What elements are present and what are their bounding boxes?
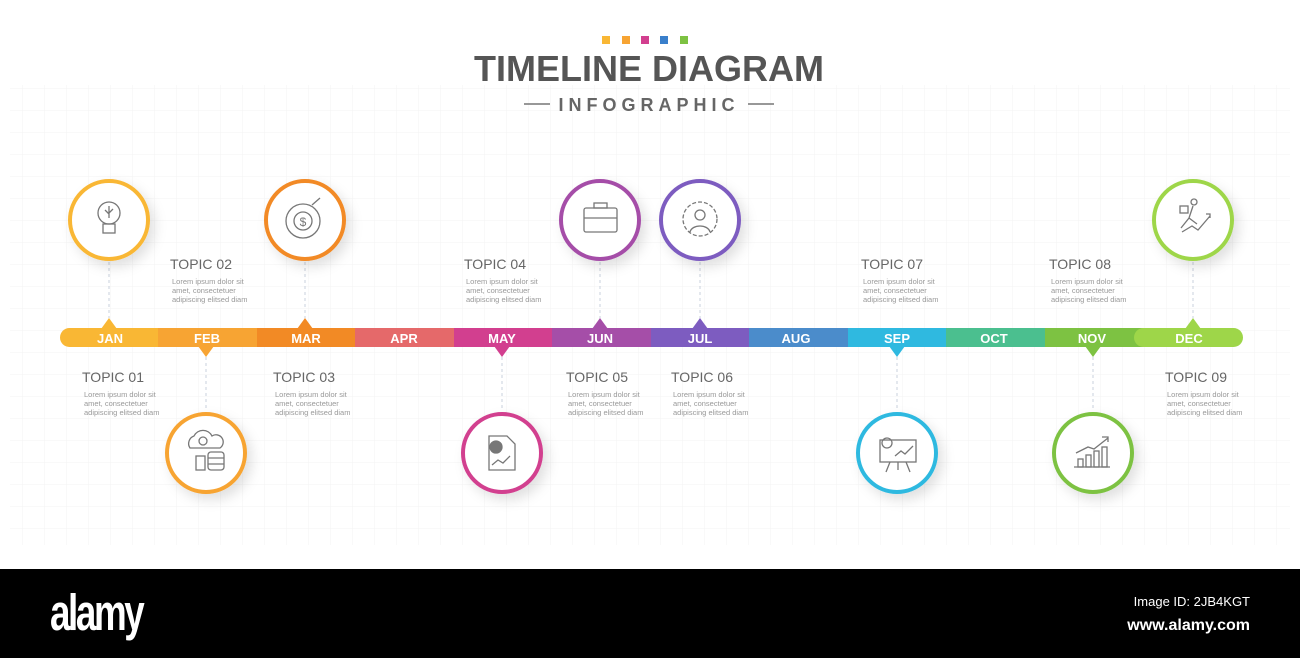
topic 05 xyxy=(566,369,643,417)
topic 04: adipiscing elitsed diam xyxy=(466,295,541,304)
topic 02: adipiscing elitsed diam xyxy=(172,295,247,304)
topic 03: TOPIC 03 xyxy=(273,369,335,385)
topic 08 xyxy=(1049,256,1126,304)
topic 04: amet, consectetuer xyxy=(466,286,530,295)
topic 09: TOPIC 09 xyxy=(1165,369,1227,385)
topic 01: TOPIC 01 xyxy=(82,369,144,385)
timeline bar: NOV xyxy=(1078,331,1106,346)
topic 04: Lorem ipsum dolor sit xyxy=(466,277,539,286)
topic 07: adipiscing elitsed diam xyxy=(863,295,938,304)
icon: gear person (JUL) xyxy=(661,181,739,259)
topic 07: amet, consectetuer xyxy=(863,286,927,295)
topic 06: Lorem ipsum dolor sit xyxy=(673,390,746,399)
footer xyxy=(0,569,1300,658)
topic 02: TOPIC 02 xyxy=(170,256,232,272)
timeline bar: DEC xyxy=(1175,331,1203,346)
topic 01 xyxy=(82,369,159,417)
icon: dollar chart (MAR): $ xyxy=(300,215,307,229)
topic 09: Lorem ipsum dolor sit xyxy=(1167,390,1240,399)
topic 03 xyxy=(273,369,350,417)
icon: runner growth (DEC) xyxy=(1154,181,1232,259)
footer: alamy xyxy=(50,585,145,641)
topic 03: amet, consectetuer xyxy=(275,399,339,408)
icon: briefcase (JUN) xyxy=(561,181,639,259)
topic 06: amet, consectetuer xyxy=(673,399,737,408)
topic 02: Lorem ipsum dolor sit xyxy=(172,277,245,286)
topic 01: amet, consectetuer xyxy=(84,399,148,408)
topic 07 xyxy=(861,256,938,304)
icon: cloud database (FEB) xyxy=(167,414,245,492)
topic 08: amet, consectetuer xyxy=(1051,286,1115,295)
icon: bar chart growth (NOV) xyxy=(1054,414,1132,492)
icon: dollar chart (MAR) xyxy=(266,181,344,259)
topic 05: adipiscing elitsed diam xyxy=(568,408,643,417)
title color squares xyxy=(602,36,688,44)
topic 07: Lorem ipsum dolor sit xyxy=(863,277,936,286)
topic 02: amet, consectetuer xyxy=(172,286,236,295)
topic texts xyxy=(82,256,1242,417)
topic 05: Lorem ipsum dolor sit xyxy=(568,390,641,399)
dashed connectors xyxy=(109,262,1193,411)
pointers xyxy=(101,318,117,329)
topic 03: Lorem ipsum dolor sit xyxy=(275,390,348,399)
topic 09: amet, consectetuer xyxy=(1167,399,1231,408)
topic 02 xyxy=(170,256,247,304)
timeline bar xyxy=(60,318,1243,357)
topic 06: TOPIC 06 xyxy=(671,369,733,385)
footer: www.alamy.com xyxy=(1126,617,1250,634)
footer: Image ID: 2JB4KGT xyxy=(1134,594,1250,609)
timeline bar: FEB xyxy=(194,331,220,346)
icon: lightbulb (JAN) xyxy=(70,181,148,259)
topic 04: TOPIC 04 xyxy=(464,256,526,272)
timeline bar: MAY xyxy=(488,331,516,346)
icon: report (MAY) xyxy=(463,414,541,492)
title: TIMELINE DIAGRAM xyxy=(474,48,824,89)
timeline bar: JAN xyxy=(97,331,123,346)
timeline bar: AUG xyxy=(782,331,810,346)
topic 06 xyxy=(671,369,748,417)
topic 01: adipiscing elitsed diam xyxy=(84,408,159,417)
timeline bar: OCT xyxy=(980,331,1008,346)
topic 05: amet, consectetuer xyxy=(568,399,632,408)
subtitle: INFOGRAPHIC xyxy=(558,95,740,115)
topic 04 xyxy=(464,256,541,304)
timeline bar: MAR xyxy=(291,331,321,346)
timeline bar: SEP xyxy=(884,331,910,346)
topic 03: adipiscing elitsed diam xyxy=(275,408,350,417)
topic 09 xyxy=(1165,369,1242,417)
topic 06: adipiscing elitsed diam xyxy=(673,408,748,417)
topic 05: TOPIC 05 xyxy=(566,369,628,385)
topic 08: TOPIC 08 xyxy=(1049,256,1111,272)
topic 01: Lorem ipsum dolor sit xyxy=(84,390,157,399)
topic 08: adipiscing elitsed diam xyxy=(1051,295,1126,304)
topic 07: TOPIC 07 xyxy=(861,256,923,272)
timeline bar: JUN xyxy=(587,331,613,346)
topic 09: adipiscing elitsed diam xyxy=(1167,408,1242,417)
timeline bar: APR xyxy=(390,331,418,346)
topic 08: Lorem ipsum dolor sit xyxy=(1051,277,1124,286)
icon: presentation (SEP) xyxy=(858,414,936,492)
timeline bar: JUL xyxy=(688,331,712,346)
